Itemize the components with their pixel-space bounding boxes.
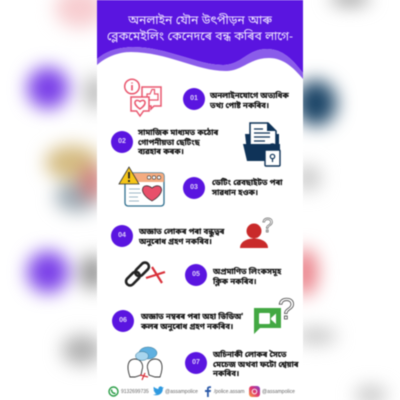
facebook handle: /police.assam xyxy=(214,389,245,395)
text 01: অনলাইনযোগে অত্যধিক xyxy=(210,91,289,100)
icon: instagram xyxy=(248,385,261,398)
step 05 xyxy=(124,260,282,288)
number 01: 01 xyxy=(190,95,198,102)
number 01 xyxy=(183,88,205,110)
instagram handle: @assampolice xyxy=(262,389,295,395)
text 03: ডেটিং ৱেবছাইটত পৰা xyxy=(212,178,282,187)
icon: facebook xyxy=(204,386,212,398)
number 02: 02 xyxy=(118,138,126,145)
icon: dating site warning xyxy=(118,166,166,208)
text 01: তথ্য পোষ্ট নকৰিব। xyxy=(210,101,269,110)
text 03 xyxy=(211,177,284,197)
text 07: নকৰিব। xyxy=(213,369,239,378)
icon: whatsapp xyxy=(108,386,120,398)
infographic panel xyxy=(97,0,303,400)
text 06: কলৰ অনুৰোধ গ্ৰহণ নকৰিব। xyxy=(141,322,233,331)
icon: video call question xyxy=(253,293,295,334)
number 02 xyxy=(111,131,133,153)
icon: unknown person xyxy=(239,215,274,249)
icon: video call question: ? xyxy=(278,293,295,326)
number 03: 03 xyxy=(190,184,198,191)
step 04 xyxy=(110,215,274,249)
number 07 xyxy=(185,352,207,374)
title: ব্লেকমেইলিং কেনেদৰে বন্ধ কৰিব লাগে- xyxy=(107,29,293,43)
number 04 xyxy=(111,225,133,247)
text 04: অনুৰোধ গ্ৰহণ নকৰিব। xyxy=(139,237,212,246)
text 05 xyxy=(212,266,282,287)
text 06 xyxy=(140,311,244,332)
text 02: সামাজিক মাধ্যমত কঠোৰ xyxy=(138,128,218,137)
twitter handle: @assampolice xyxy=(165,389,198,395)
title xyxy=(106,12,294,44)
whatsapp number: 9132699735 xyxy=(121,389,149,395)
text 07 xyxy=(212,349,300,378)
step 02 xyxy=(110,121,282,168)
text 01 xyxy=(209,90,290,110)
text 02: ব্যৱহাৰ কৰক। xyxy=(138,147,184,156)
text 04: অজ্ঞাত লোকৰ পৰা বন্ধুত্বৰ xyxy=(139,227,224,236)
text 03: সাৱধান হওক। xyxy=(212,188,258,197)
step 06 xyxy=(111,293,295,334)
icon: broken link xyxy=(124,260,166,288)
title: অনলাইন যৌন উৎপীড়ন আৰু xyxy=(128,13,272,27)
icon: twitter xyxy=(152,386,164,396)
text 04 xyxy=(138,227,226,247)
step 01 xyxy=(123,78,290,118)
number 03 xyxy=(183,177,205,199)
icon: social feedback xyxy=(123,78,162,118)
number 04: 04 xyxy=(118,232,126,239)
text 05: ক্লিক নকৰিব। xyxy=(213,277,256,286)
icon: unknown person: ? xyxy=(262,215,273,237)
number 06: 06 xyxy=(119,317,127,324)
step 03 xyxy=(118,166,284,208)
icon: locked folder xyxy=(242,121,282,168)
number 05: 05 xyxy=(192,271,200,278)
number 05 xyxy=(185,264,207,286)
number 07: 07 xyxy=(192,359,200,366)
footer: social links xyxy=(108,385,296,398)
text 07: মেচেজ অথবা ফটো শ্বেয়াৰ xyxy=(213,360,298,369)
text 05: অপ্ৰমাণিত লিংকসমূহ xyxy=(213,267,281,276)
icon: people talking xyxy=(126,346,164,381)
header background with wave xyxy=(96,0,304,80)
text 06: অজ্ঞাত নম্বৰৰ পৰা অহা ভিডিঅ' xyxy=(141,312,243,321)
text 07: অচিনাকী লোকৰ সৈতে xyxy=(213,350,286,359)
text 02: গোপনীয়তা ছেটিংছ xyxy=(138,138,200,147)
step 07 xyxy=(126,346,300,381)
text 02 xyxy=(137,127,220,156)
number 06 xyxy=(112,310,134,332)
